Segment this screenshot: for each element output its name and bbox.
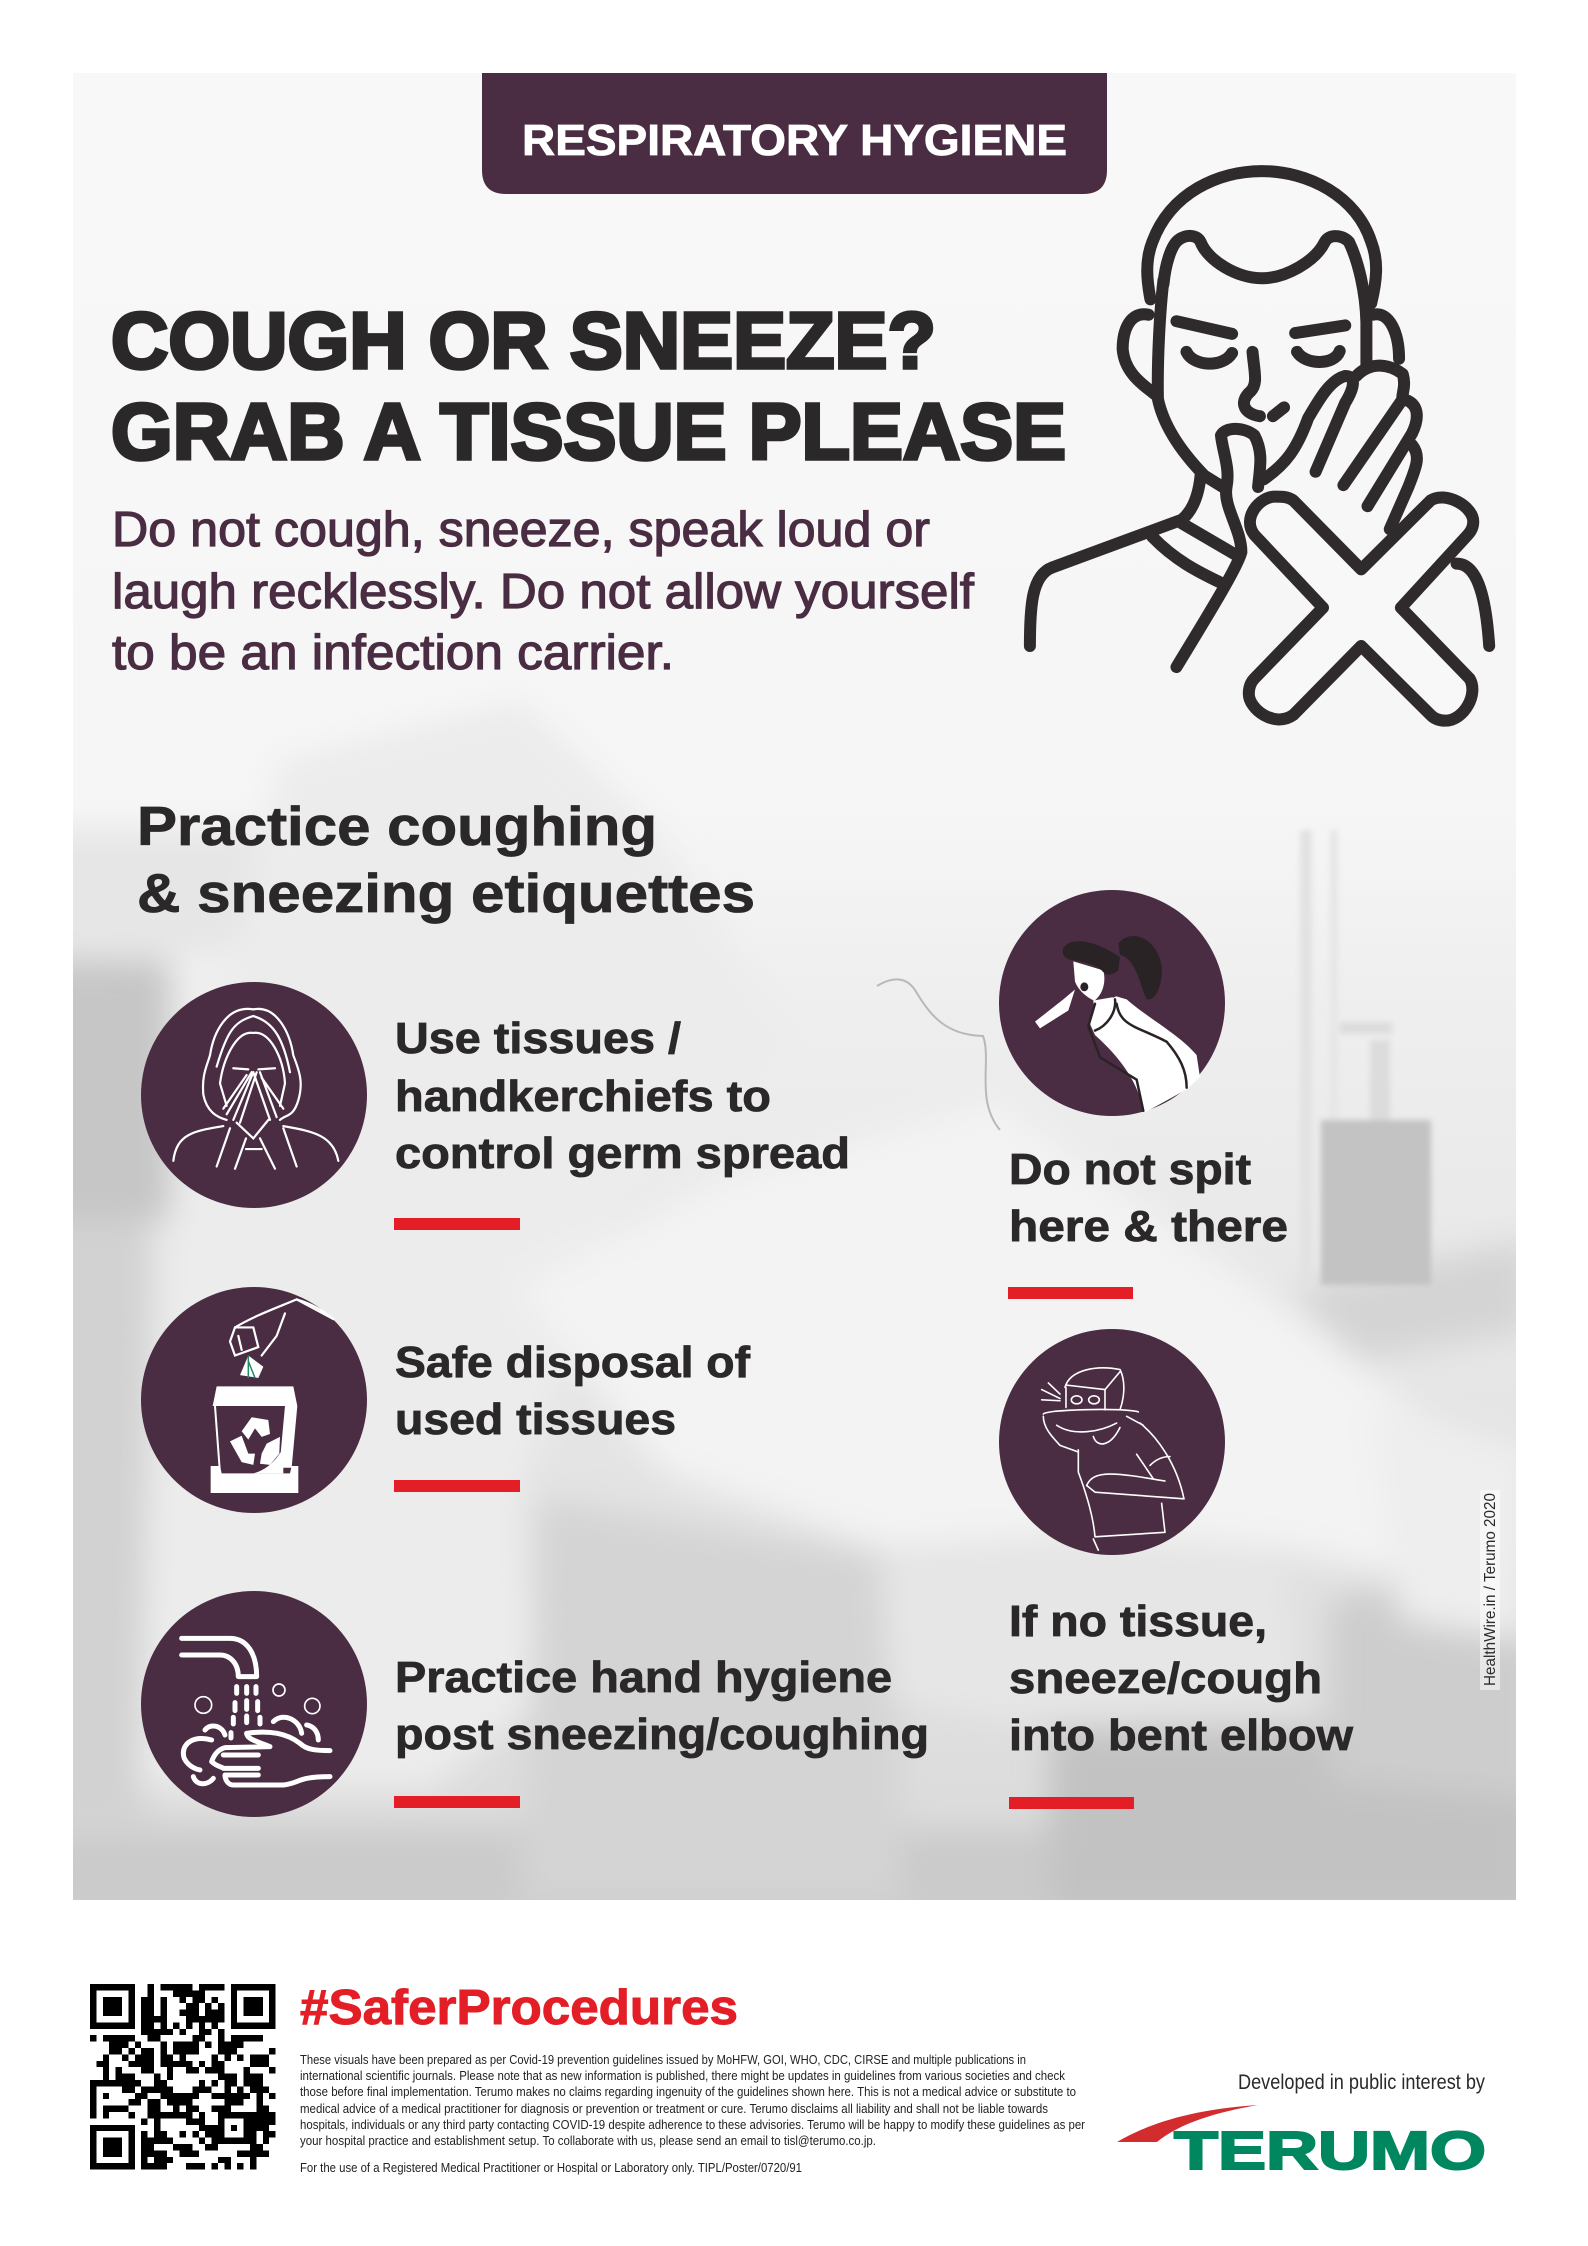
hashtag: #SaferProcedures (300, 1981, 738, 2035)
text: use tissues: Use tissues / (395, 1014, 681, 1063)
text: use tissues: handkerchiefs to (395, 1072, 771, 1121)
text: do not spit (1009, 1145, 1288, 1251)
icon: sneeze into elbow (999, 1329, 1225, 1555)
text: bent elbow: sneeze/cough (1009, 1654, 1322, 1703)
subtitle text (112, 503, 974, 680)
credit text: HealthWire.in / Terumo 2020 (1482, 1493, 1499, 1686)
red rule (1009, 1797, 1134, 1809)
red rule (1008, 1287, 1133, 1299)
title: GRAB A TISSUE PLEASE (111, 387, 1066, 476)
background photo panel (73, 445, 1516, 1900)
subtitle text: Do not cough, sneeze, speak loud or (112, 503, 930, 557)
title (111, 296, 1066, 476)
Terumo logo: TERUMO (1174, 2121, 1486, 2181)
header tab: RESPIRATORY HYGIENE (522, 116, 1067, 165)
text: use tissues: control germ spread (395, 1129, 850, 1178)
icon: safe disposal bin (141, 1287, 367, 1513)
subtitle text: to be an infection carrier. (112, 626, 674, 680)
text: hand hygiene: Practice hand hygiene (395, 1653, 892, 1702)
disclaimer (300, 2052, 1086, 2175)
Terumo logo (1117, 2105, 1486, 2181)
text: safe disposal: Safe disposal of (395, 1338, 750, 1387)
text: hand hygiene: post sneezing/coughing (395, 1710, 929, 1759)
icon: woman spitting (999, 890, 1225, 1116)
red rule (394, 1796, 520, 1808)
section heading: Practice coughing (137, 795, 657, 857)
disclaimer: those before final implementation. Terumo makes no claims regarding ingenuity of the guidelines shown here. This is not a medical advice or substitute to (300, 2084, 1076, 2099)
text: do not spit: Do not spit (1009, 1145, 1251, 1194)
text: bent elbow: If no tissue, (1009, 1597, 1267, 1646)
red rule (394, 1218, 520, 1230)
text: safe disposal: used tissues (395, 1395, 676, 1444)
disclaimer: For the use of a Registered Medical Practitioner or Hospital or Laboratory only. TIPL/Poster/0720/91 (300, 2160, 802, 2175)
disclaimer: These visuals have been prepared as per Covid-19 prevention guidelines issued by MoHFW, GOI, WHO, CDC, CIRSE and multiple publications in (300, 2052, 1026, 2067)
text: do not spit: here & there (1009, 1202, 1288, 1251)
text: use tissues (395, 1014, 850, 1178)
disclaimer: hospitals, individuals or any third party contacting COVID-19 despite adherence to these advisories. Terumo will be happy to modify these guidelines as per (300, 2117, 1086, 2132)
icon: woman with tissue (141, 982, 367, 1208)
disclaimer: your hospital practice and establishment setup. To collaborate with us, please send an email to tisl@terumo.co.jp. (300, 2133, 876, 2148)
text: safe disposal (395, 1338, 750, 1444)
text: bent elbow (1009, 1597, 1354, 1760)
red rule (394, 1480, 520, 1492)
header tab (482, 73, 1107, 194)
QR code (90, 1984, 276, 2170)
icon: man covering mouth with X (1030, 171, 1489, 721)
title: COUGH OR SNEEZE? (111, 296, 936, 385)
disclaimer: medical advice of a medical practitioner for diagnosis or prevention or treatment or cure. Terumo disclaims all liability and shall not be liable towards (300, 2101, 1048, 2116)
subtitle text: laugh recklessly. Do not allow yourself (112, 565, 974, 619)
disclaimer: international scientific journals. Please note that as new information is published, there might be updates in guidelines from various societies and check (300, 2068, 1065, 2083)
section heading: & sneezing etiquettes (137, 862, 755, 924)
text: bent elbow: into bent elbow (1009, 1711, 1354, 1760)
developed by text: Developed in public interest by (1238, 2071, 1485, 2094)
section heading (137, 795, 755, 924)
icon: hand washing (141, 1591, 367, 1817)
text: hand hygiene (395, 1653, 929, 1759)
